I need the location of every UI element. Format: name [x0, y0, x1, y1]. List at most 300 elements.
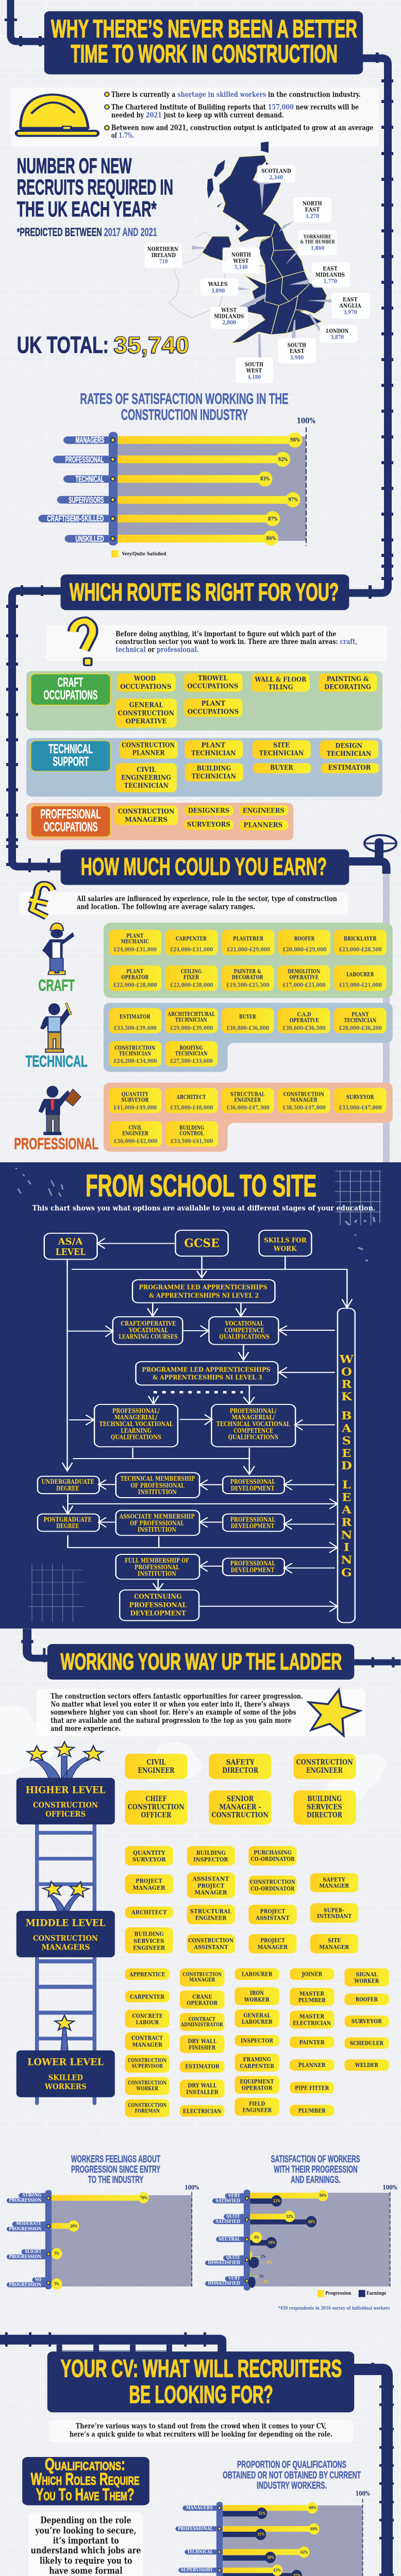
map labels: MIDLANDS	[315, 272, 345, 278]
panel: craft occupations: TILING	[269, 684, 293, 691]
bar chart: satisfaction	[38, 391, 315, 557]
job chips: lower level	[125, 1968, 389, 2117]
panel: craft occupations: PLANT	[202, 700, 225, 707]
panel: professional salaries: ENGINEER	[122, 1130, 148, 1137]
panel: technical salaries: £30,600-£36,500	[282, 1025, 326, 1031]
map labels: SOUTH	[288, 342, 306, 349]
panel: craft salaries: £24,000-£31,000	[113, 946, 157, 953]
job chips: lower level: WORKER	[244, 1996, 270, 2003]
job chips: lower level: CONTRACT	[131, 2035, 163, 2041]
job chips: middle level: ASSISTANT	[193, 1944, 228, 1951]
panel: ladder intro: somewhere higher you can shoot for. Here’s an example of some of the jobs	[51, 1708, 296, 1717]
legend	[318, 2290, 387, 2297]
job chips: lower level: INSPECTOR	[241, 2037, 273, 2044]
flowchart: apprenticeship boxes: TECHNICAL VOCATIONAL	[99, 1421, 173, 1428]
panel: technical salaries: ARCHITECHTURAL	[168, 1011, 215, 1018]
panel: craft salaries: DEMOLITION	[288, 969, 320, 975]
flowchart: top row: WORK	[273, 1244, 297, 1252]
panel: professional salaries: ENGINEER	[235, 1097, 261, 1103]
panel: technical salaries: £33,500-£39,600	[114, 1025, 157, 1031]
chart title	[271, 2154, 360, 2185]
job chips: higher level: CONSTRUCTION	[211, 1810, 269, 1819]
panel: professional occupations: OCCUPATIONS	[43, 820, 98, 834]
chart: satisfaction with progression and earnings: 9%	[254, 2235, 259, 2240]
flowchart: top row: LEVEL	[56, 1246, 86, 1258]
chart title: INDUSTRY WORKERS.	[257, 2480, 327, 2491]
job chips: middle level: STRUCTURAL	[190, 1908, 231, 1915]
panel: technical salaries: TECHNICIAN	[175, 1050, 207, 1057]
job chips: middle level: PROJECT	[260, 1938, 285, 1944]
panel: professional salaries: SURVEYOR	[121, 1097, 149, 1103]
panel: technical support: CIVIL	[137, 766, 156, 773]
panel: craft salaries: FIXER	[183, 974, 199, 980]
panel: craft occupations: OPERATIVE	[126, 718, 167, 725]
panel: professional salaries: CONTROL	[179, 1130, 204, 1137]
panel: craft occupations: OCCUPATIONS	[120, 683, 171, 690]
panel: qualifications text: Depending on the role	[40, 2515, 131, 2526]
flowchart: apprenticeship boxes: LEARNING COURSES	[119, 1333, 178, 1341]
UK total: 35,740	[114, 332, 189, 358]
chart: qualifications obtained: 100%	[356, 2490, 370, 2498]
flowchart: degrees and memberships: CONTINUING	[134, 1593, 181, 1601]
job chips: lower level: CONCRETE	[132, 2012, 163, 2019]
flowchart: degrees and memberships: INSTITUTION	[138, 1570, 176, 1578]
heading: how much could you earn	[61, 849, 349, 885]
ladder	[16, 1742, 115, 2105]
map values: 3,970	[343, 309, 357, 315]
work based learning column: WORK BASED LEARNING	[339, 1352, 354, 1579]
chart: feelings about progression: 70%	[140, 2196, 147, 2200]
job chips: middle level: INTENDANT	[317, 1913, 352, 1920]
panel: ladder intro	[36, 1685, 366, 1737]
facts text	[111, 90, 373, 140]
chart: feelings about progression: 20%	[70, 2224, 77, 2229]
panel: ladder intro: that are available and the natural progression to the top as you gain more	[51, 1716, 292, 1724]
job chips: middle level: CO-ORDINATOR	[250, 1856, 295, 1863]
panel: key facts	[11, 88, 378, 147]
chart: qualifications obtained: 32%	[258, 2512, 265, 2516]
job chips: middle level: INSPECTOR	[193, 1857, 228, 1863]
panel: professional occupations: PLANNERS	[243, 821, 282, 829]
sign: middle level: CONSTRUCTION	[33, 1934, 98, 1943]
map labels: & THE HUMBER	[300, 239, 335, 245]
panel: technical salaries: OPERATIVE	[290, 1017, 319, 1023]
panel: qualifications text: you’re looking to secure,	[35, 2525, 136, 2536]
chart: feelings about progression: PROGRESSION	[9, 2281, 42, 2287]
job chips: lower level: GENERAL	[243, 2012, 271, 2019]
icon: hard hat	[16, 94, 98, 136]
sign: middle level: MANAGERS	[41, 1942, 90, 1952]
flowchart: degrees and memberships: ASSOCIATE MEMBERSHIP	[119, 1513, 195, 1520]
panel: craft salaries: CEILING	[181, 969, 202, 975]
job chips: higher level: CONSTRUCTION	[296, 1758, 353, 1767]
facts text: needed by 2021 just to keep up with current demand.	[111, 111, 284, 120]
flowchart: apprenticeship boxes: CRAFT/OPERATIVE	[121, 1320, 176, 1327]
map labels: WEST	[246, 367, 262, 374]
flowchart: degrees and memberships: INSTITUTION	[138, 1488, 177, 1496]
panel: craft salaries: £17,000-£25,000	[282, 982, 326, 988]
panel: craft occupations	[26, 671, 382, 731]
chart title: AND EARNINGS.	[291, 2174, 340, 2185]
map labels: NORTHERN	[147, 246, 178, 253]
job chips: middle level: SURVEYOR	[132, 1857, 166, 1863]
heading: qualifications	[22, 2455, 149, 2505]
chart: satisfaction with progression and earnings: QUITE	[226, 2255, 240, 2260]
job chips: higher level: DIRECTOR	[222, 1766, 259, 1774]
bar chart: satisfaction: 100%	[297, 416, 315, 426]
job chips: lower level: CARPENTER	[130, 1993, 165, 2000]
panel: CV intro	[48, 2420, 354, 2443]
chart title	[223, 2459, 361, 2491]
map: UK regions	[144, 142, 370, 383]
map pointers	[192, 180, 331, 358]
flowchart: top row: SKILLS FOR	[264, 1236, 307, 1244]
panel: qualifications text: likely to require you to	[40, 2555, 132, 2566]
flowchart: degrees and memberships: DEVELOPMENT	[130, 1609, 186, 1617]
chart: satisfaction with progression and earnings: DISSATISFIED	[208, 2280, 240, 2286]
chart: feelings about progression	[7, 2154, 199, 2290]
panel: professional salaries: £33,500-£41,500	[171, 1138, 213, 1144]
panel: professional salaries	[14, 1082, 393, 1153]
work based learning column	[199, 1308, 355, 1622]
job chips: lower level: CONSTRUCTION	[128, 2080, 167, 2086]
job chips: middle level: MANAGER	[133, 1885, 165, 1891]
pipe: top left	[5, 0, 46, 46]
panel: craft salaries: £24,000-£31,000	[170, 946, 213, 953]
row values: 92%	[278, 456, 288, 463]
job chips: lower level: SCHEDULER	[350, 2040, 383, 2046]
map labels: LONDON	[326, 328, 349, 335]
job chips: lower level: OPERATOR	[187, 1999, 218, 2006]
flowchart: apprenticeship boxes: & APPRENTICESHIPS NI LEVEL 2	[149, 1292, 259, 1299]
heading: number of new recruits: NUMBER OF NEW	[17, 154, 132, 178]
row values: 98%	[290, 437, 300, 443]
row values: 87%	[268, 516, 277, 522]
job chips: lower level: ROOFER	[356, 1996, 378, 2003]
UK total: UK TOTAL:	[17, 332, 109, 358]
map labels: NORTH	[231, 252, 251, 259]
panel: craft salaries: PAINTER &	[234, 969, 261, 975]
flowchart: apprenticeship boxes: TECHNICAL VOCATIONAL	[216, 1421, 290, 1428]
panel: earnings intro	[19, 884, 348, 917]
job chips: lower level: ELECTRICIAN	[293, 2020, 331, 2026]
panel: professional occupations: PROFFESIONAL	[40, 807, 101, 821]
icon: technical worker	[40, 1003, 72, 1053]
panel: craft salaries: PLANT	[126, 933, 143, 939]
job chips: lower level: PLUMBER	[298, 1996, 326, 2004]
job chips: lower level: MANAGER	[132, 2041, 163, 2048]
icon: craft worker	[42, 923, 74, 975]
job chips: lower level: ADMINISTRATOR	[180, 2021, 223, 2028]
sign: middle level	[16, 1911, 115, 1957]
panel: professional salaries: QUANTITY	[122, 1091, 148, 1097]
job chips: middle level	[125, 1846, 358, 1954]
job chips: lower level: EQUIPMENT	[240, 2078, 274, 2085]
pipe: pale vertical with valve	[345, 835, 396, 1162]
panel: technical salaries: £29,000-£39,000	[170, 1025, 213, 1031]
panel: professional occupations: CONSTRUCTION	[118, 808, 174, 816]
panel: technical support: TECHNICAL	[48, 742, 93, 756]
chart: satisfaction with progression and earnings: 19%	[268, 2241, 275, 2245]
chart: satisfaction with progression and earnings: QUITE	[226, 2213, 240, 2219]
map labels: MIDLANDS	[214, 313, 244, 320]
job chips: higher level: SERVICES	[307, 1803, 342, 1811]
panel: technical support	[26, 738, 382, 796]
map values: 2,340	[269, 174, 283, 181]
map labels: EAST	[343, 296, 358, 303]
chart title	[71, 2154, 160, 2185]
icon: star	[302, 1685, 364, 1737]
job chips: lower level: DRY WALL	[188, 2082, 216, 2089]
panel: technical support: TECHNICIAN	[191, 750, 236, 757]
job chips: middle level: ENGINEER	[195, 1915, 227, 1922]
panel: technical support: TECHNICIAN	[327, 750, 371, 757]
job chips: lower level: CARPENTER	[240, 2062, 274, 2069]
panel: professional salaries: CIVIL	[129, 1125, 142, 1131]
map labels: SOUTH	[245, 361, 263, 368]
job chips: middle level: MANAGER	[319, 1883, 349, 1890]
flowchart: degrees and memberships: PROFESSIONAL	[135, 1564, 179, 1571]
chart: qualifications obtained: 62%	[300, 2550, 308, 2555]
pipe: top right vertical	[345, 53, 393, 599]
job chips: lower level: ELECTRICIAN	[183, 2108, 222, 2114]
bar chart: satisfaction: MANAGERS	[75, 435, 104, 445]
sign: lower level: WORKERS	[44, 2082, 87, 2091]
heading: number of new recruits	[17, 154, 173, 239]
job chips: higher level: SAFETY	[226, 1758, 255, 1767]
flowchart: degrees and memberships: OF PROFESSIONAL	[130, 1520, 184, 1527]
job chips: lower level: LABOURER	[242, 1971, 273, 1977]
panel: technical salaries: TECHNICAL	[26, 1052, 88, 1070]
flowchart: apprenticeship boxes: LEARNING	[121, 1427, 152, 1434]
job chips: middle level: SAFETY	[323, 1876, 345, 1884]
panel: professional occupations: SURVEYORS	[187, 821, 230, 828]
panel: technical salaries	[26, 1003, 393, 1072]
legend: Progression	[325, 2290, 351, 2296]
star: lower level	[55, 2015, 74, 2051]
job chips: lower level: DRY WALL	[188, 2038, 216, 2044]
heading: qualifications: Which Roles Require	[31, 2469, 139, 2488]
heading: which route	[61, 574, 349, 610]
map labels: ANGLIA	[339, 302, 361, 310]
sign: lower level: LOWER LEVEL	[27, 2057, 104, 2068]
sign: higher level: OFFICERS	[45, 1809, 86, 1819]
job chips: middle level: MANAGER	[195, 1889, 227, 1896]
map values: 3,870	[331, 333, 344, 341]
map values: 3,940	[290, 354, 304, 361]
craft chips	[116, 673, 377, 727]
chalk decoration	[15, 1168, 381, 1261]
chart: qualifications obtained: SUPERVISORY	[181, 2567, 213, 2573]
flowchart: apprenticeship boxes: MANAGERIAL/	[114, 1414, 158, 1421]
panel: craft salaries: £21,000-£29,000	[227, 946, 270, 953]
flowchart: degrees and memberships: OF PROFESSIONAL	[131, 1482, 185, 1489]
panel: craft salaries: £15,000-£21,000	[339, 982, 382, 988]
panel: technical salaries: C.A.D	[297, 1011, 311, 1018]
chart: satisfaction with progression and earnings: DISSATISFIED	[208, 2260, 240, 2265]
row labels	[47, 435, 104, 544]
chart title: TO THE INDUSTRY	[88, 2174, 143, 2185]
flowchart: apprenticeship boxes: PROGRAMME LED APPRENTICESHIPS	[142, 1366, 270, 1374]
job chips: middle level: ASSISTANT	[255, 1915, 290, 1922]
job chips: lower level: FRAMING	[243, 2056, 271, 2063]
panel: professional occupations: MANAGERS	[125, 816, 168, 824]
sign: higher level: CONSTRUCTION	[33, 1800, 98, 1809]
panel: craft occupations: TROWEL	[198, 674, 228, 682]
job chips: middle level: QUANTITY	[133, 1850, 165, 1856]
panel: craft occupations: WOOD	[133, 675, 156, 683]
panel: craft salaries: £22,000-£28,000	[113, 982, 157, 988]
bar chart: satisfaction: SUPERVISORS	[69, 495, 104, 504]
job chips: lower level: OPERATOR	[242, 2084, 273, 2091]
job chips: higher level: SENIOR	[227, 1794, 254, 1803]
panel: qualifications text: it’s important to	[53, 2535, 119, 2546]
map labels: NORTH	[303, 200, 322, 207]
panel: professional occupations: ENGINEERS	[243, 807, 285, 815]
panel: ladder intro: No matter what level you enter it or when you enter into it, there’s always	[51, 1700, 290, 1708]
panel: earnings intro: and location. The following are average salary ranges.	[77, 902, 255, 911]
job chips: lower level: INSTALLER	[186, 2089, 219, 2095]
job chips: middle level: SERVICES	[133, 1938, 164, 1945]
job chips: lower level: FINISHER	[189, 2044, 216, 2050]
flowchart: apprenticeship boxes: MANAGERIAL/	[232, 1414, 275, 1421]
chart: feelings about progression: 100%	[185, 2184, 199, 2191]
bar chart: satisfaction: PROFESSIONAL	[65, 455, 104, 464]
job chips: lower level: JOINER	[302, 1971, 323, 1977]
panel: technical support: SITE	[273, 741, 290, 749]
map labels: WEST	[233, 258, 249, 265]
legend: Very/Quite Satisfied	[122, 551, 166, 557]
panel: craft salaries: MECHANIC	[121, 938, 149, 945]
map values: 4,180	[247, 374, 261, 380]
bullets	[105, 92, 109, 130]
job chips: lower level: CONSTRUCTION	[128, 2057, 167, 2063]
panel: technical salaries: ROOFING	[179, 1045, 203, 1051]
panel: technical support: CONSTRUCTION	[122, 741, 175, 749]
job chips: middle level: ENGINEER	[133, 1945, 165, 1952]
chart: feelings about progression: WORKERS FEELINGS ABOUT	[71, 2154, 160, 2165]
flowchart: apprenticeship boxes: PROFESSIONAL/	[230, 1408, 277, 1415]
panel: technical support: BUILDING	[197, 765, 231, 772]
job chips: middle level: PURCHASING	[254, 1850, 292, 1856]
panel: qualifications text: have some formal	[49, 2565, 123, 2576]
job chips: lower level: MANAGER	[189, 1976, 215, 1983]
panel: professional salaries: £33,000-£47,000	[339, 1105, 382, 1111]
flowchart: degrees and memberships: TECHNICAL MEMBERSHIP	[121, 1476, 195, 1483]
job chips: lower level: CONSTRUCTION	[182, 1971, 222, 1977]
panel: professional salaries: CONSTRUCTION	[283, 1091, 324, 1097]
map callouts	[144, 165, 370, 383]
map values: 2,800	[222, 319, 236, 326]
facts text: There is currently a shortage in skilled workers in the construction industry.	[111, 90, 361, 98]
flowchart: degrees and memberships: DEGREE	[56, 1522, 79, 1530]
job chips: lower level: FOREMAN	[135, 2108, 160, 2114]
pipe: right CV long	[350, 2363, 401, 2576]
technical chips	[116, 740, 379, 792]
flowchart: degrees and memberships	[38, 1308, 355, 1622]
panel: ladder intro: and more experience.	[51, 1724, 121, 1733]
job chips: middle level: MANAGER	[319, 1944, 349, 1951]
icon: professional worker	[38, 1086, 81, 1135]
panel: craft salaries: DECORATOR	[232, 974, 263, 980]
panel: craft salaries: £23,000-£28,500	[339, 946, 382, 953]
panel: technical support: ENGINEERING	[121, 774, 171, 782]
panel: craft salaries: PLANT	[126, 969, 143, 975]
chart: satisfaction with progression and earnings: 2%	[261, 2255, 265, 2259]
chart: satisfaction with progression and earnings: 48%	[308, 2220, 315, 2225]
flowchart: apprenticeship boxes: PROGRAMME LED APPRENTICESHIPS	[139, 1284, 268, 1291]
job chips: lower level: LABOURER	[242, 2018, 273, 2025]
chart title	[80, 391, 289, 423]
chart: satisfaction with progression and earnings: NEUTRAL	[219, 2236, 240, 2242]
chart: feelings about progression: 5%	[54, 2251, 59, 2256]
flowchart: apprenticeship boxes: VOCATIONAL	[128, 1327, 168, 1334]
chart: qualifications obtained: 69%	[310, 2527, 318, 2532]
decoration clouds	[0, 1705, 386, 1803]
chart: satisfaction with progression and earnings	[205, 2154, 397, 2311]
panel: professional salaries: BUILDING	[179, 1125, 204, 1131]
job chips: higher level: ENGINEER	[306, 1766, 343, 1774]
job chips: higher level	[125, 1754, 356, 1825]
chart: satisfaction with progression and earnings: 56%	[319, 2194, 326, 2198]
bar chart: satisfaction: UNSKILLED	[75, 534, 104, 544]
chart: feelings about progression: 5%	[54, 2282, 59, 2286]
chart: feelings about progression: PROGRESSION	[9, 2197, 42, 2203]
panel: craft occupations: OCCUPATIONS	[187, 683, 238, 690]
job chips: lower level: CONTRACT	[189, 2016, 215, 2022]
heading: from school to site	[32, 1168, 375, 1212]
flowchart: apprenticeship boxes	[94, 1280, 295, 1447]
panel: qualifications text	[29, 2513, 143, 2576]
job chips: higher level: CONSTRUCTION	[128, 1803, 185, 1811]
heading: qualifications: Qualifications:	[45, 2455, 125, 2474]
legend	[111, 550, 166, 557]
panel: professional salaries: PROFESSIONAL	[14, 1134, 98, 1153]
panel: technical salaries: £28,000-£36,200	[339, 1025, 382, 1031]
flowchart: degrees and memberships: PROFESSIONAL	[129, 1601, 187, 1609]
panel: route intro	[46, 621, 388, 665]
job chips: middle level: ASSISTANT	[192, 1876, 229, 1883]
panel: technical salaries: £30,800-£36,800	[226, 1025, 269, 1031]
chart: satisfaction with progression and earnings: 6%	[268, 2260, 272, 2265]
panel: craft salaries: £19,500-£25,500	[226, 982, 270, 988]
panel: craft salaries: CRAFT	[38, 976, 75, 994]
chart: feelings about progression: PROGRESSION	[9, 2253, 42, 2260]
icon: pound sign	[29, 884, 53, 917]
pipe: ladder section	[21, 1629, 401, 1667]
panel: technical salaries: CONSTRUCTION	[114, 1045, 155, 1051]
job chips: middle level: CONSTRUCTION	[250, 1879, 295, 1886]
job chips: lower level: FIELD	[249, 2100, 265, 2107]
panel: technical support: PLANT	[202, 741, 225, 749]
salary chips	[109, 930, 387, 991]
job chips: lower level: CRANE	[192, 1993, 212, 2000]
panel: craft salaries: ROOFER	[294, 936, 315, 942]
panel: professional salaries: £36,000-£42,000	[114, 1138, 157, 1144]
map labels: WEST	[221, 307, 237, 314]
chart: satisfaction with progression and earnings: 32%	[286, 2215, 293, 2219]
chart: qualifications obtained	[175, 2459, 370, 2576]
map values: 710	[159, 258, 168, 265]
legend: Earnings	[366, 2290, 387, 2296]
chart: qualifications obtained: PROFESSIONAL	[178, 2526, 213, 2532]
job chips: middle level: ARCHITECT	[131, 1909, 167, 1916]
job chips: lower level: MASTER	[299, 2013, 325, 2020]
panel: craft salaries: CARPENTER	[176, 936, 207, 942]
panel: technical support: ESTIMATOR	[328, 764, 371, 772]
title	[44, 11, 363, 74]
panel: craft occupations: GENERAL	[129, 701, 163, 709]
